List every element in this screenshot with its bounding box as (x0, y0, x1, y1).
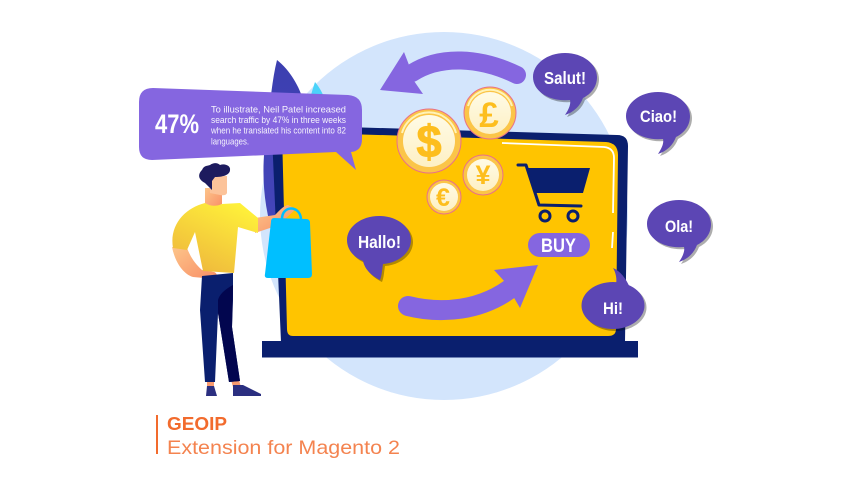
neck (205, 188, 222, 208)
left shoe (206, 386, 217, 396)
coin: dollar (397, 109, 461, 173)
callout text (210, 104, 346, 148)
buy button (528, 233, 590, 257)
coin: pound: £ (479, 96, 499, 135)
ankles (207, 380, 241, 387)
person (172, 163, 296, 396)
trousers (200, 273, 240, 382)
coin: euro (427, 180, 461, 214)
shirt (172, 203, 258, 273)
top arrow (380, 52, 517, 94)
speech bubble: Hi: Hi! (603, 299, 623, 318)
statistic: 47% (155, 109, 199, 139)
speech bubble: Ciao (626, 92, 692, 156)
right arm (255, 205, 296, 233)
speech bubble: Ola (647, 200, 713, 264)
callout box (139, 88, 362, 170)
leaf: indigo (263, 60, 303, 240)
laptop base (262, 341, 638, 358)
coin: yen (463, 155, 503, 195)
coin: pound (464, 87, 516, 139)
speech bubble: Ola: Ola! (665, 217, 693, 236)
callout text: languages. (211, 136, 249, 148)
speech bubble: Hallo: Hallo! (358, 232, 401, 252)
coin: dollar: $ (416, 116, 442, 167)
coin: yen: ¥ (475, 160, 491, 190)
accent bar (156, 415, 158, 454)
callout text: when he translated his content into 82 (210, 126, 346, 136)
callout text: search traffic by 47% in three weeks (211, 115, 346, 126)
callout text: To illustrate, Neil Patel increased (211, 104, 346, 116)
screen highlight (502, 143, 614, 248)
subtitle: Extension for Magento 2 (167, 437, 400, 459)
face (209, 176, 227, 195)
bottom arrow (408, 265, 538, 310)
icon: shopping cart (518, 165, 590, 221)
leaf: cyan (310, 82, 325, 100)
product name: GEOIP (167, 414, 227, 434)
speech bubble: Ciao: Ciao! (640, 107, 677, 126)
background circle (260, 32, 628, 400)
shopping bag (265, 208, 312, 278)
trouser shadow (218, 285, 240, 382)
speech bubble: Hallo (347, 216, 413, 282)
laptop body (272, 125, 628, 342)
speech bubble: Salut: Salut! (544, 68, 586, 88)
coin: euro: € (436, 184, 450, 212)
speech bubble: Salut (533, 53, 599, 117)
buy button: BUY (541, 236, 576, 257)
footer title (156, 414, 400, 459)
laptop screen (282, 132, 618, 336)
hair (199, 163, 230, 190)
speech bubble: Hi (582, 268, 646, 331)
left arm (172, 247, 217, 279)
right shoe (233, 385, 261, 396)
callout (139, 88, 362, 170)
laptop (262, 125, 638, 358)
